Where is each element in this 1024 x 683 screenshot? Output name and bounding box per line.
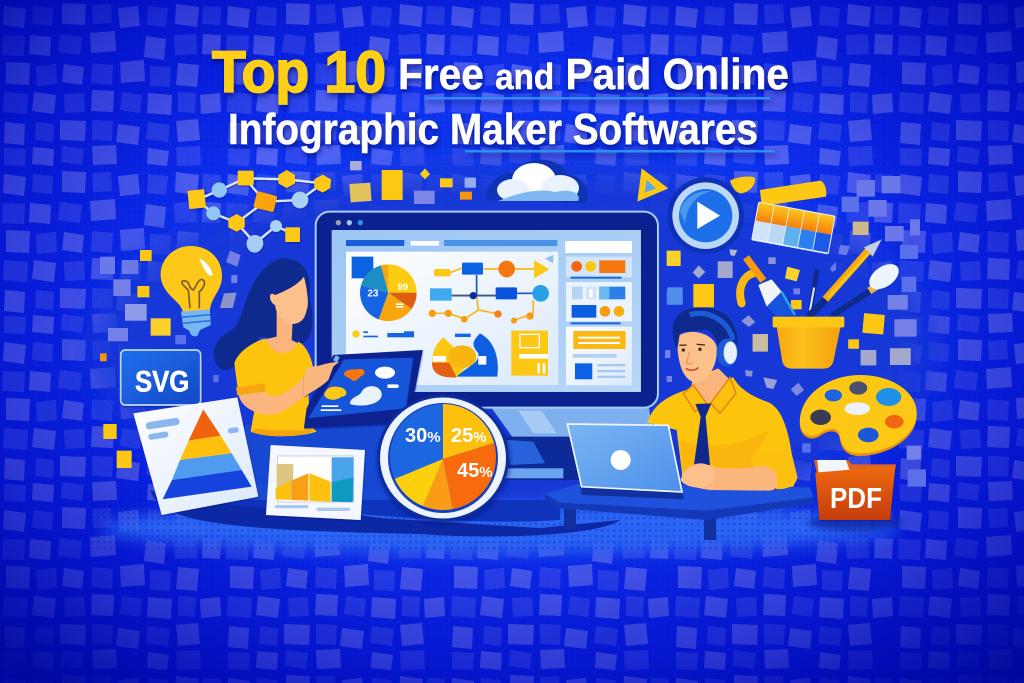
head bbox=[677, 332, 717, 383]
window dots bbox=[336, 220, 363, 225]
title: Top 10: Top 10 bbox=[212, 40, 386, 105]
pie label 30%: 30% bbox=[405, 425, 441, 447]
tablet stickers bbox=[344, 369, 365, 381]
headphones bbox=[690, 313, 738, 367]
chart legend bbox=[352, 330, 414, 338]
title: second line: Infographic Maker Softwares bbox=[228, 105, 758, 154]
hair bbox=[673, 307, 738, 357]
paintbrushes bbox=[740, 251, 877, 316]
arm bbox=[238, 363, 338, 415]
sleeve bbox=[236, 383, 266, 395]
icon: PDF folder: PDF bbox=[830, 483, 882, 515]
hand on tablet bbox=[304, 362, 339, 397]
pie chart on screen bbox=[352, 257, 417, 321]
title underline top bbox=[425, 97, 770, 100]
yellow card strip bbox=[760, 181, 826, 206]
pot bbox=[773, 317, 844, 369]
tie bbox=[694, 403, 711, 465]
forearm bbox=[682, 463, 779, 491]
shirt fold bbox=[680, 430, 770, 477]
facial features bbox=[679, 344, 705, 370]
abstract shape chart bbox=[432, 333, 498, 377]
rolled sleeve bbox=[752, 450, 797, 489]
chart document bbox=[266, 445, 365, 520]
neck and face bbox=[265, 277, 308, 354]
shirt bbox=[234, 338, 317, 436]
tablet bbox=[304, 350, 423, 428]
pie chart on screen: 99 bbox=[398, 282, 408, 292]
laptop bbox=[567, 424, 684, 499]
shirt shadow bbox=[251, 428, 315, 436]
flowchart bbox=[429, 255, 553, 324]
yellow info card bbox=[511, 331, 548, 376]
monitor stand bbox=[488, 403, 653, 480]
left side illustrations bbox=[100, 235, 365, 520]
man torso bbox=[647, 377, 797, 490]
icon: cloud bbox=[487, 160, 588, 203]
brush bristles bbox=[865, 259, 903, 294]
decorative tiles bbox=[667, 176, 920, 365]
pyramid document bbox=[133, 397, 258, 515]
decorative tiles left bbox=[100, 235, 263, 468]
monitor screen bbox=[332, 230, 641, 392]
icon: play button bbox=[667, 177, 744, 254]
badge: SVG bbox=[121, 350, 201, 405]
monitor frame bbox=[316, 212, 658, 408]
right side scene bbox=[545, 290, 926, 540]
top right tools bbox=[637, 168, 920, 369]
yellow blob bbox=[730, 177, 755, 193]
decorative tiles right bbox=[665, 290, 926, 487]
icon: network diagram bbox=[187, 170, 331, 252]
pie chart on screen: 23 bbox=[367, 289, 379, 300]
pencil tip bbox=[864, 239, 882, 257]
icon: paint palette bbox=[800, 375, 917, 456]
desk bbox=[545, 483, 814, 540]
title bbox=[212, 40, 789, 154]
right side panels bbox=[565, 241, 632, 385]
main canvas bbox=[346, 252, 558, 385]
small decorative tiles near top bbox=[349, 161, 476, 204]
pie label 25%: 25% bbox=[451, 425, 487, 447]
neck bbox=[690, 368, 732, 405]
toolbar bbox=[346, 240, 557, 246]
badge: SVG: SVG bbox=[135, 366, 189, 399]
icon: lightbulb bbox=[161, 246, 222, 336]
woman at tablet bbox=[214, 258, 338, 436]
collar bbox=[683, 377, 736, 413]
hand on keyboard bbox=[681, 465, 715, 488]
monitor bbox=[316, 212, 658, 480]
icon: triangle bbox=[637, 168, 668, 202]
scene halo bbox=[90, 165, 933, 552]
hair bbox=[214, 258, 313, 370]
title underline bottom bbox=[465, 150, 775, 152]
title: first line: Free and Paid Online bbox=[398, 50, 789, 99]
pie label 45%: 45% bbox=[457, 460, 493, 482]
big pie chart bbox=[377, 395, 510, 525]
colour swatch card bbox=[751, 201, 836, 254]
icon: PDF folder bbox=[814, 460, 896, 520]
